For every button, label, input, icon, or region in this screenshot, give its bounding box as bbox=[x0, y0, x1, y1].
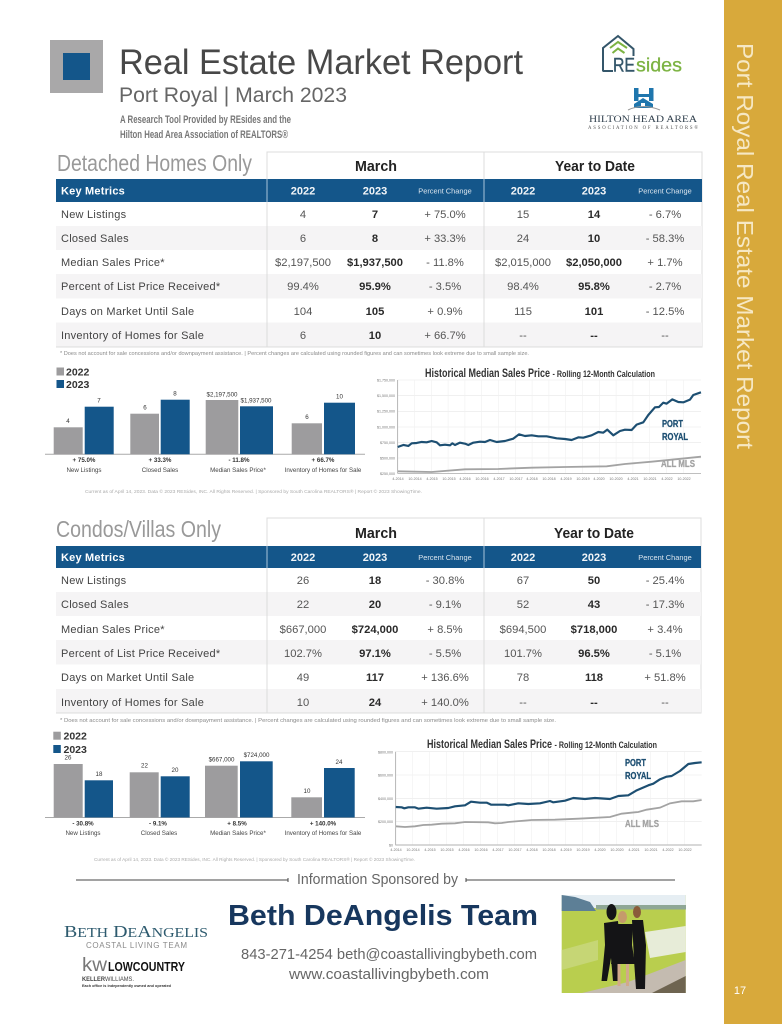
panel: detached homes table: + 1.7% bbox=[647, 257, 683, 269]
bar chart: detached homes: - 11.8% bbox=[229, 457, 250, 464]
panel: condos table: 96.5% bbox=[578, 648, 610, 660]
panel: detached homes table: Median Sales Price* bbox=[61, 257, 165, 269]
line chart: detached homes historical price: 4-2016 bbox=[459, 477, 471, 481]
panel: detached homes table: -- bbox=[590, 330, 598, 342]
panel: detached homes table: New Listings bbox=[61, 209, 127, 221]
bar chart: condos: $724,000 bbox=[244, 752, 270, 759]
line chart: condos historical price: 4-2014 bbox=[390, 848, 402, 852]
bar chart: detached homes bbox=[45, 366, 365, 474]
panel: condos table: Key Metrics bbox=[61, 552, 125, 564]
bar chart: condos: Inventory of Homes for Sale bbox=[285, 830, 362, 837]
panel: condos table: 26 bbox=[297, 575, 309, 587]
line chart: condos historical price: 4-2019 bbox=[560, 848, 572, 852]
line chart: detached homes historical price: ALL MLS bbox=[661, 458, 695, 470]
panel: detached homes table: - 6.7% bbox=[649, 209, 681, 221]
panel: condos table: Percent Change bbox=[418, 553, 472, 562]
panel: condos table: $694,500 bbox=[500, 624, 546, 636]
bar chart: condos: New Listings bbox=[65, 830, 101, 837]
logo: KW Lowcountry bbox=[82, 955, 186, 988]
copyright line: Current as of April 14, 2023. Data © 2023 RESides, INC. All Rights Reserved. | Sponsored by South Carolina REALTORS® | Report © 2023 ShowingTime. bbox=[94, 856, 415, 862]
panel: detached homes table: Percent of List Price Received* bbox=[61, 281, 221, 293]
line chart: condos historical price: 4-2018 bbox=[526, 848, 538, 852]
bar chart: condos: 10 bbox=[304, 788, 311, 795]
bar chart: condos: 20 bbox=[172, 767, 179, 774]
panel: detached homes table: - 11.8% bbox=[426, 257, 464, 269]
line chart: detached homes historical price: 10-2016 bbox=[475, 477, 489, 481]
panel: condos table: - 25.4% bbox=[646, 575, 684, 587]
line chart: detached homes historical price: 10-2019 bbox=[576, 477, 590, 481]
legend: 2023 bbox=[64, 744, 87, 756]
line chart: detached homes historical price: Historical Median Sales Price - Rolling 12-Month Calculation bbox=[425, 366, 655, 380]
panel: condos table: - 9.1% bbox=[429, 599, 461, 611]
logo: KW Lowcountry: LOWCOUNTRY bbox=[108, 960, 186, 974]
bar chart: condos: Median Sales Price* bbox=[210, 830, 266, 837]
panel: condos table: 2022 bbox=[291, 552, 315, 564]
line chart: detached homes historical price: 10-2017 bbox=[509, 477, 523, 481]
logo: Hilton Head Area bbox=[588, 88, 698, 131]
logo: Hilton Head Area: ASSOCIATION OF REALTORS® bbox=[588, 125, 698, 131]
bar chart: detached homes: + 33.3% bbox=[149, 457, 172, 464]
line chart: detached homes historical price: $1,750,000 bbox=[377, 378, 395, 382]
line chart: condos historical price: 4-2016 bbox=[458, 848, 470, 852]
line chart: detached homes historical price: 10-2020 bbox=[609, 477, 623, 481]
bar chart: condos: - 9.1% bbox=[149, 820, 167, 828]
bar chart: detached homes: 4 bbox=[66, 418, 70, 425]
panel: condos table: 24 bbox=[369, 697, 382, 709]
line chart: detached homes historical price: 4-2015 bbox=[426, 477, 438, 481]
bar chart: detached homes: New Listings bbox=[66, 467, 102, 474]
line chart: detached homes historical price: $500,000 bbox=[380, 456, 395, 460]
bar chart: condos: 22 bbox=[141, 762, 148, 770]
line chart: detached homes historical price: 10-2021 bbox=[643, 477, 657, 481]
panel: detached homes table: 99.4% bbox=[287, 281, 319, 293]
panel: detached homes table: 2023 bbox=[582, 186, 606, 198]
heading: Detached Homes Only: Detached Homes Only bbox=[57, 150, 252, 176]
title block: Real Estate Market Report bbox=[119, 43, 523, 82]
line chart: detached homes historical price bbox=[377, 366, 701, 481]
panel: detached homes table: + 0.9% bbox=[427, 306, 463, 318]
panel: detached homes table: 115 bbox=[514, 306, 532, 318]
panel: condos table: 2023 bbox=[582, 552, 606, 564]
panel: condos table: -- bbox=[661, 697, 669, 709]
bar chart: detached homes: 10 bbox=[336, 394, 343, 400]
figure: right woman bbox=[632, 906, 646, 989]
bar chart: detached homes: 7 bbox=[97, 398, 101, 404]
logo: REsides bbox=[603, 36, 682, 76]
panel: condos table: -- bbox=[519, 697, 527, 709]
panel: detached homes table: 105 bbox=[366, 306, 384, 318]
panel: condos table: - 17.3% bbox=[646, 599, 684, 611]
panel: condos table: Days on Market Until Sale bbox=[61, 672, 194, 684]
bar chart: condos: 18 bbox=[96, 771, 103, 778]
line chart: detached homes historical price: 4-2020 bbox=[593, 477, 605, 481]
panel: detached homes table: 2022 bbox=[291, 186, 315, 198]
panel: detached homes table: 10 bbox=[588, 233, 600, 245]
panel: detached homes table: 10 bbox=[369, 330, 381, 342]
line chart: condos historical price: 10-2014 bbox=[406, 848, 420, 852]
logo: KW Lowcountry: KELLERWILLIAMS. bbox=[82, 977, 134, 983]
sponsor heading with rules: Information Sponsored by bbox=[297, 872, 459, 888]
sidebar: gold vertical band: Port Royal Real Estate Market Report bbox=[732, 43, 758, 450]
bar chart: detached homes: Closed Sales bbox=[142, 467, 178, 474]
panel: detached homes table: + 33.3% bbox=[424, 233, 466, 245]
line chart: detached homes historical price: 4-2017 bbox=[493, 477, 505, 481]
logo: REsides: sides bbox=[636, 56, 682, 76]
panel: detached homes table: Year to Date bbox=[555, 158, 635, 175]
panel: condos table: Year to Date bbox=[554, 525, 634, 542]
line chart: detached homes historical price: $250,000 bbox=[380, 472, 395, 476]
panel: detached homes table: 24 bbox=[517, 233, 529, 245]
logo: Beth DeAngelis Coastal Living Team bbox=[64, 922, 208, 950]
panel: detached homes table: 6 bbox=[300, 330, 306, 342]
panel: detached homes table: 15 bbox=[517, 209, 529, 221]
line chart: condos historical price: 4-2021 bbox=[628, 848, 640, 852]
line chart: detached homes historical price: 10-2018 bbox=[542, 477, 556, 481]
bar chart: condos: $667,000 bbox=[209, 756, 235, 764]
panel: detached homes table: $2,050,000 bbox=[566, 257, 622, 269]
panel: condos table: 49 bbox=[297, 672, 309, 684]
panel: condos table: 50 bbox=[588, 575, 600, 587]
line chart: detached homes historical price: $1,500,000 bbox=[377, 394, 395, 398]
line chart: condos historical price: 10-2017 bbox=[508, 848, 522, 852]
bar chart: condos: - 30.8% bbox=[72, 820, 94, 828]
panel: condos table: - 30.8% bbox=[426, 575, 464, 587]
panel: condos table: 43 bbox=[588, 599, 600, 611]
panel: condos table: 67 bbox=[517, 575, 529, 587]
line chart: condos historical price: 10-2015 bbox=[440, 848, 454, 852]
panel: detached homes table: 104 bbox=[294, 306, 312, 318]
line chart: detached homes historical price: 4-2018 bbox=[526, 477, 538, 481]
panel: condos table: + 3.4% bbox=[647, 624, 683, 636]
figure: left woman bbox=[602, 904, 620, 981]
line chart: detached homes historical price: 10-2022 bbox=[677, 477, 691, 481]
panel: condos table: $667,000 bbox=[280, 624, 326, 636]
panel: condos table: 18 bbox=[369, 575, 381, 587]
panel: detached homes table: -- bbox=[661, 330, 669, 342]
title block: A Research Tool Provided by REsides and the bbox=[120, 114, 291, 126]
line chart: detached homes historical price: $1,250,000 bbox=[377, 410, 395, 414]
panel: detached homes table: 4 bbox=[300, 209, 306, 221]
panel: detached homes table: 7 bbox=[372, 209, 378, 221]
panel: detached homes table: Days on Market Until Sale bbox=[61, 306, 194, 318]
bar chart: condos: 26 bbox=[65, 754, 72, 762]
bar chart: detached homes: 8 bbox=[173, 390, 177, 398]
panel: condos table: 101.7% bbox=[504, 648, 542, 660]
panel: condos table: Closed Sales bbox=[61, 599, 129, 611]
panel: detached homes table: 95.8% bbox=[578, 281, 610, 293]
title block: Hilton Head Area Association of REALTORS® bbox=[120, 129, 288, 141]
line chart: condos historical price bbox=[378, 737, 702, 852]
panel: condos table: + 8.5% bbox=[427, 624, 463, 636]
line chart: condos historical price: 10-2021 bbox=[644, 848, 658, 852]
bar chart: detached homes: + 66.7% bbox=[312, 457, 335, 464]
panel: condos table: 118 bbox=[585, 672, 603, 684]
panel: detached homes table: - 3.5% bbox=[429, 281, 461, 293]
line chart: detached homes historical price: 4-2022 bbox=[661, 477, 673, 481]
bar chart: detached homes: $2,197,500 bbox=[207, 392, 238, 398]
sponsor contact bbox=[241, 946, 537, 983]
bar chart: detached homes: 6 bbox=[305, 414, 309, 421]
line chart: condos historical price: $600,000 bbox=[378, 774, 393, 778]
logo: REsides: RE bbox=[613, 56, 635, 76]
sponsor contact: 843-271-4254 beth@coastallivingbybeth.com bbox=[241, 946, 537, 963]
line chart: condos historical price: 4-2022 bbox=[662, 848, 674, 852]
panel: condos table: 97.1% bbox=[359, 648, 391, 660]
line chart: detached homes historical price: ROYAL bbox=[662, 431, 688, 443]
legend: 2022 bbox=[64, 731, 87, 743]
panel: detached homes table: March bbox=[355, 158, 397, 175]
panel: condos table: 117 bbox=[366, 672, 384, 684]
panel: condos table: + 51.8% bbox=[644, 672, 686, 684]
sponsor heading with rules bbox=[76, 872, 675, 888]
logo: Beth DeAngelis Coastal Living Team: BETH DEANGELIS bbox=[64, 922, 208, 941]
line chart: condos historical price: 10-2016 bbox=[474, 848, 488, 852]
panel: condos table: - 5.1% bbox=[649, 648, 681, 660]
panel: condos table: -- bbox=[590, 697, 598, 709]
panel: detached homes table: - 2.7% bbox=[649, 281, 681, 293]
panel: condos table: 52 bbox=[517, 599, 529, 611]
legend bbox=[56, 366, 90, 391]
panel: condos table: New Listings bbox=[61, 575, 127, 587]
panel: detached homes table: 101 bbox=[585, 306, 603, 318]
line chart: condos historical price: 10-2018 bbox=[542, 848, 556, 852]
panel: condos table: + 140.0% bbox=[421, 697, 469, 709]
panel: condos table: 2023 bbox=[363, 552, 387, 564]
panel: condos table: $718,000 bbox=[571, 624, 617, 636]
panel: detached homes table: $2,015,000 bbox=[495, 257, 551, 269]
panel: condos table: Percent of List Price Received* bbox=[61, 648, 221, 660]
line chart: condos historical price: Historical Median Sales Price - Rolling 12-Month Calculation bbox=[427, 737, 657, 751]
icon: report square bbox=[50, 40, 103, 93]
bar chart: detached homes: $1,937,500 bbox=[241, 398, 272, 404]
line chart: detached homes historical price: $1,000,000 bbox=[377, 426, 395, 430]
logo: KW Lowcountry: kw bbox=[82, 955, 107, 976]
sidebar: gold vertical band: 17 bbox=[734, 985, 746, 997]
footnote: * Does not account for sale concessions and/or downpayment assistance. | Percent changes are calculated using rounded figures and can sometimes look extreme due to small sample size. bbox=[60, 351, 529, 357]
panel: condos table: March bbox=[355, 525, 397, 542]
panel: detached homes table: Closed Sales bbox=[61, 233, 129, 245]
panel: detached homes table: + 66.7% bbox=[424, 330, 466, 342]
panel: condos table: $724,000 bbox=[352, 624, 398, 636]
panel: detached homes table: 2022 bbox=[511, 186, 535, 198]
logo: KW Lowcountry: Each office is independently owned and operated bbox=[82, 984, 172, 988]
panel: detached homes table: Key Metrics bbox=[61, 186, 125, 198]
line chart: condos historical price: 4-2020 bbox=[594, 848, 606, 852]
line chart: detached homes historical price: 4-2014 bbox=[392, 477, 404, 481]
sponsor name: Beth DeAngelis Team bbox=[228, 900, 538, 932]
line chart: condos historical price: ALL MLS bbox=[625, 818, 659, 830]
legend bbox=[53, 731, 87, 756]
bar chart: condos: 24 bbox=[336, 759, 343, 766]
panel: detached homes table: + 75.0% bbox=[424, 209, 466, 221]
line chart: condos historical price: ROYAL bbox=[625, 770, 651, 782]
bar chart: detached homes: 6 bbox=[143, 404, 147, 412]
line chart: condos historical price: 4-2017 bbox=[492, 848, 504, 852]
line chart: detached homes historical price: 10-2014 bbox=[408, 477, 422, 481]
panel: detached homes table: 98.4% bbox=[507, 281, 539, 293]
photo: team on boardwalk bbox=[562, 895, 686, 993]
panel: detached homes table: - 12.5% bbox=[646, 306, 684, 318]
figure: centre woman bbox=[611, 911, 635, 986]
line chart: detached homes historical price: $750,000 bbox=[380, 441, 395, 445]
bar chart: condos: Closed Sales bbox=[141, 830, 177, 837]
sponsor contact: www.coastallivingbybeth.com bbox=[288, 966, 489, 983]
line chart: detached homes historical price: 4-2019 bbox=[560, 477, 572, 481]
line chart: condos historical price: $800,000 bbox=[378, 750, 393, 754]
panel: condos table: Percent Change bbox=[638, 553, 692, 562]
legend: 2022 bbox=[66, 366, 90, 378]
panel: condos table: Inventory of Homes for Sale bbox=[61, 697, 204, 709]
panel: condos table: - 5.5% bbox=[429, 648, 461, 660]
line chart: detached homes historical price: 10-2015 bbox=[442, 477, 456, 481]
legend: 2023 bbox=[66, 379, 90, 391]
line chart: condos historical price: 10-2020 bbox=[610, 848, 624, 852]
line chart: condos historical price: 10-2022 bbox=[678, 848, 692, 852]
heading: Condos/Villas Only: Condos/Villas Only bbox=[56, 516, 221, 542]
bar chart: condos: + 140.0% bbox=[310, 820, 337, 828]
line chart: condos historical price: PORT bbox=[625, 757, 646, 769]
panel: detached homes table: 8 bbox=[372, 233, 378, 245]
panel: detached homes table: 95.9% bbox=[359, 281, 391, 293]
panel: detached homes table: $1,937,500 bbox=[347, 257, 403, 269]
panel: detached homes table bbox=[56, 152, 702, 347]
panel: condos table: 2022 bbox=[511, 552, 535, 564]
bar chart: condos bbox=[45, 731, 365, 837]
panel: detached homes table: 6 bbox=[300, 233, 306, 245]
line chart: condos historical price: $0 bbox=[389, 844, 393, 848]
line chart: detached homes historical price: PORT bbox=[662, 418, 683, 430]
panel: condos table: + 136.6% bbox=[421, 672, 469, 684]
bar chart: detached homes: Inventory of Homes for Sale bbox=[285, 467, 362, 474]
sidebar: gold vertical band bbox=[724, 0, 782, 1024]
panel: condos table: 10 bbox=[297, 697, 309, 709]
line chart: detached homes historical price: 4-2021 bbox=[627, 477, 639, 481]
panel: condos table: 22 bbox=[297, 599, 309, 611]
line chart: condos historical price: 4-2015 bbox=[424, 848, 436, 852]
panel: detached homes table: -- bbox=[519, 330, 527, 342]
bar chart: detached homes: Median Sales Price* bbox=[210, 467, 266, 474]
title block: Port Royal | March 2023 bbox=[119, 84, 347, 107]
copyright line: Current as of April 14, 2023. Data © 2023 RESides, INC. All Rights Reserved. | Sponsored by South Carolina REALTORS® | Report © 2023 ShowingTime. bbox=[85, 488, 422, 494]
line chart: condos historical price: 10-2019 bbox=[576, 848, 590, 852]
line chart: condos historical price: $200,000 bbox=[378, 820, 393, 824]
logo: Beth DeAngelis Coastal Living Team: COASTAL LIVING TEAM bbox=[86, 941, 187, 950]
panel: detached homes table: 2023 bbox=[363, 186, 387, 198]
line chart: condos historical price: $400,000 bbox=[378, 797, 393, 801]
logo: Hilton Head Area: HILTON HEAD AREA bbox=[589, 115, 697, 125]
panel: detached homes table: Percent Change bbox=[638, 186, 692, 196]
bar chart: detached homes: + 75.0% bbox=[73, 457, 96, 464]
title block bbox=[119, 43, 523, 141]
panel: detached homes table: $2,197,500 bbox=[275, 257, 331, 269]
panel: condos table: Median Sales Price* bbox=[61, 624, 165, 636]
panel: detached homes table: - 58.3% bbox=[646, 233, 684, 245]
panel: condos table: 102.7% bbox=[284, 648, 322, 660]
panel: detached homes table: 14 bbox=[588, 209, 601, 221]
bar chart: condos: + 8.5% bbox=[227, 820, 247, 828]
panel: condos table: 78 bbox=[517, 672, 529, 684]
panel: condos table bbox=[56, 518, 701, 713]
panel: detached homes table: Inventory of Homes for Sale bbox=[61, 330, 204, 342]
footnote: * Does not account for sale concessions and/or downpayment assistance. | Percent changes are calculated using rounded figures and can sometimes look extreme due to small sample size. bbox=[60, 718, 556, 724]
panel: condos table: 20 bbox=[369, 599, 381, 611]
panel: detached homes table: Percent Change bbox=[418, 186, 472, 196]
